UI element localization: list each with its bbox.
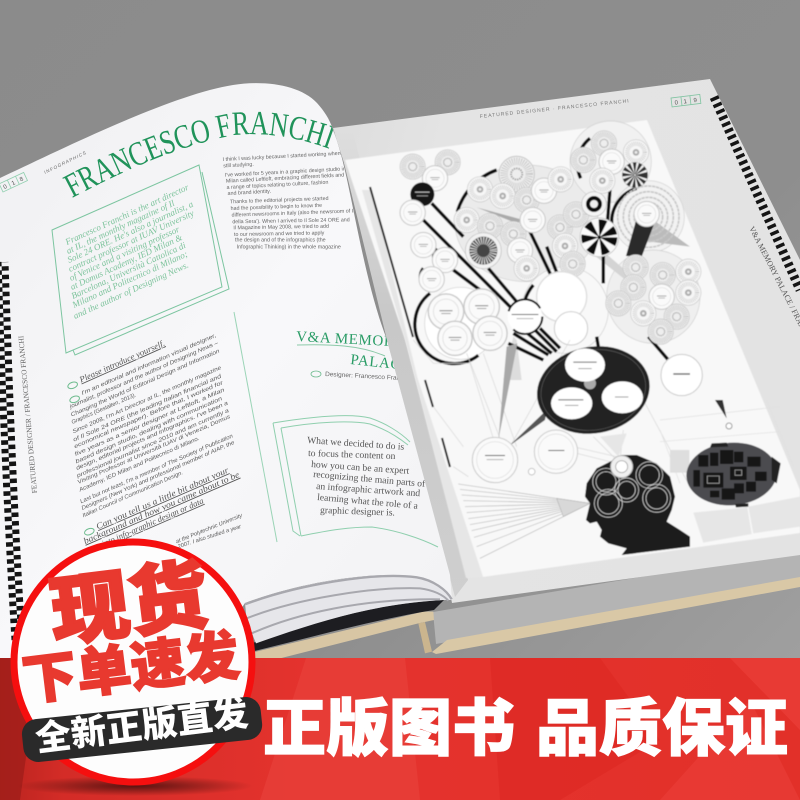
third column text: the design and of the infographics (the xyxy=(235,238,326,244)
third column text: della Sera'). When I arrived to Il Sole 24 ORE and xyxy=(232,217,350,225)
intro text: contract professor at IUAV University xyxy=(67,208,196,274)
quote text: recognizing the main parts of xyxy=(313,469,426,490)
answer body: I'm an editorial and information visual designer, xyxy=(81,333,217,397)
answer body: Changing the World of Editorial Design and Information xyxy=(70,349,221,418)
question two: background and how you came about to be xyxy=(82,469,241,546)
answer body: Italian Council of Communication Design. xyxy=(82,470,184,519)
round stamp xyxy=(14,542,264,796)
intro text: Barcelona, Università Cattolica di xyxy=(70,240,188,301)
dark textured circle xyxy=(622,162,648,188)
quote text: learning what the role of a xyxy=(317,492,419,512)
title: FRANCESCO FRANCHI xyxy=(62,112,333,198)
page number box xyxy=(671,94,701,107)
answer body: based design studio, dealing with communication xyxy=(75,396,223,465)
answer body: professional journalist since 2010 and am currently a xyxy=(75,408,230,480)
segmented fan xyxy=(618,186,679,247)
answer body: of Il Sole 24 ORE (the leading Italian financial and xyxy=(72,373,223,443)
stamp subheading: 下单速发 xyxy=(19,626,243,712)
small ring xyxy=(528,468,535,475)
lower-left circle three xyxy=(438,321,472,355)
third column text: different newsrooms in Italy (also the newsroom of Il Corriere xyxy=(232,208,375,219)
headline: 正版图书 xyxy=(263,695,515,764)
wedges xyxy=(477,207,690,380)
top-right circles xyxy=(571,131,649,193)
left white circles xyxy=(400,200,458,292)
cover board xyxy=(253,612,434,659)
intro text: at IL, the monthly magazine of Il xyxy=(65,198,176,256)
label circle left xyxy=(472,437,518,483)
question marker one xyxy=(67,381,78,390)
lower-left white circles xyxy=(428,294,464,329)
column divider xyxy=(234,312,277,542)
page number box: 9 xyxy=(693,98,698,104)
third column text: still studying. xyxy=(223,162,254,169)
page sheet xyxy=(0,83,452,670)
left page xyxy=(0,83,453,658)
quote text: how you can be an expert xyxy=(311,459,410,477)
large white circle right xyxy=(661,354,702,396)
answer body: Last but not least, I'm a member of The Society of Publication xyxy=(79,433,234,505)
intro text: and the author of Designing News. xyxy=(72,260,190,321)
question two: into info-graphic design or data xyxy=(100,495,205,548)
left header: page number: 0 xyxy=(3,184,9,191)
headline: 品质保证 xyxy=(536,695,788,764)
third column text: a range of topics relating to culture, fashion xyxy=(226,180,329,191)
small top-left circles xyxy=(400,150,460,191)
right clusters xyxy=(606,255,701,344)
pill text: 全新正版直发 xyxy=(33,694,250,759)
answer body: Academy, IED Milan and Politecnico di Milano. xyxy=(77,436,201,494)
intro text: of Venice and a visiting professor xyxy=(68,224,181,283)
stack body xyxy=(245,575,452,643)
project title: PALACE xyxy=(350,352,411,374)
grey wedges xyxy=(498,343,627,457)
third column text: and brand identity. xyxy=(227,189,271,197)
project title: V&A MEMORY xyxy=(296,329,405,351)
right book cover edge xyxy=(432,577,800,654)
plan disc xyxy=(684,440,781,508)
left header: page number: 1 xyxy=(11,180,17,187)
stamp shadow xyxy=(17,776,253,796)
lower-left circle two xyxy=(464,289,499,324)
page number box: 0 xyxy=(674,100,679,107)
cluster backgrounds xyxy=(425,121,700,359)
textured dark circle xyxy=(465,233,501,269)
cylinder cap xyxy=(634,201,659,227)
banner base xyxy=(0,658,800,800)
intro text: Sole 24 ORE. He's also a journalist, a xyxy=(66,199,195,265)
answer body xyxy=(68,333,236,519)
red banner xyxy=(0,658,800,800)
stamp large text: 现货 xyxy=(46,553,213,657)
answer two: at the Polytechnic University xyxy=(175,513,244,545)
stack shadows xyxy=(245,576,452,633)
question marker two xyxy=(84,527,95,536)
intro text: Milano and Politecnico di Milano; xyxy=(70,249,189,310)
quote text: graphic designer is. xyxy=(320,505,395,519)
black pill xyxy=(20,696,264,763)
poster: memory palace infographic xyxy=(345,120,800,578)
running head: FEATURED DESIGNER · FRANCESCO FRANCHI xyxy=(480,98,630,120)
third column text: Il Magazine in May 2008, we tried to add xyxy=(233,224,329,231)
lower-left circle four xyxy=(473,316,507,350)
lower diagram xyxy=(413,337,702,558)
third column text xyxy=(222,151,354,250)
intro text: at Domus Academy, IED Milan & xyxy=(69,232,184,292)
fan of timeline lines xyxy=(458,484,590,558)
gutter shadow xyxy=(336,128,468,597)
small ring xyxy=(726,423,732,429)
quote text: What we decided to do is xyxy=(307,435,405,453)
page number box: 1 xyxy=(683,99,688,105)
margin tick strip xyxy=(362,190,483,578)
label circle right xyxy=(534,430,578,473)
quote text: an infographic artwork and xyxy=(316,481,421,499)
intro box xyxy=(52,165,229,355)
third column text: Infographic Thinking) in the whole magazine xyxy=(237,244,341,250)
third column text: I've worked for 5 years in a graphic design studio in xyxy=(225,166,346,179)
noise text block xyxy=(670,450,689,473)
intro text xyxy=(63,182,196,321)
caption text blocks xyxy=(693,497,800,543)
interview text xyxy=(67,333,244,551)
small spike xyxy=(715,400,727,418)
black cylinder xyxy=(626,218,655,257)
right page header xyxy=(480,94,701,120)
margin black rules xyxy=(370,187,450,467)
answer body: journalist, professor and the author of Designing News – xyxy=(68,340,220,411)
question one: Please introduce yourself. xyxy=(77,338,166,385)
project title rule xyxy=(297,345,385,356)
vertical running text: FEATURED DESIGNER / FRANCESCO FRANCHI xyxy=(16,335,39,494)
clipped page text xyxy=(62,112,438,548)
answer body: Since 2008, I'm Art Director at IL, the monthly magazine xyxy=(72,365,222,435)
designer credit xyxy=(310,370,398,380)
quote box xyxy=(273,416,438,547)
poster sheet xyxy=(345,120,800,577)
third column text: Milan called Leftloft, embracing different fields and xyxy=(226,172,344,185)
quote text xyxy=(307,435,426,519)
thin construction lines xyxy=(413,340,690,487)
right page xyxy=(333,79,800,603)
quote text: to focus the content on xyxy=(308,448,396,462)
designer credit: Designer: Francesco Franchi xyxy=(325,371,409,382)
title baseline xyxy=(72,134,345,198)
black ring circle xyxy=(582,192,606,216)
third column text: had the possibility to begin to know the xyxy=(231,203,322,212)
black label circle xyxy=(410,182,434,206)
upper diagram xyxy=(400,121,701,380)
left black and white edge strip xyxy=(0,262,22,640)
headline xyxy=(263,695,788,764)
endpaper xyxy=(253,600,444,651)
centre large circles xyxy=(508,272,588,345)
right page block edge xyxy=(433,550,800,644)
third column text: Thanks to the editorial projects we started xyxy=(230,196,329,205)
third column text: I think I was lucky because I started working when I was xyxy=(222,150,355,163)
head silhouette xyxy=(585,455,690,555)
black connector lines xyxy=(407,138,668,364)
radial black and white wheel xyxy=(580,218,619,257)
intro text: Francesco Franchi is the art director xyxy=(63,182,191,247)
spine foot xyxy=(418,622,432,653)
answer body: economical newspaper). Before that, I worked for xyxy=(73,380,225,450)
answer body: five years as a senior designer at Leftloft, a Milan xyxy=(74,387,226,458)
answer body: Visiting Professor at Università IUAV di Venezia, Domus xyxy=(77,414,232,486)
stamp disc xyxy=(14,542,252,782)
left header: page number xyxy=(0,172,27,192)
answer body: Graphics (Gestalten, 2013). xyxy=(71,392,137,426)
question two: Can you tell us a little bit about your xyxy=(94,465,231,531)
answer body: design, editorial projects and infographics. I've been a xyxy=(75,401,229,472)
top-of-head white circle xyxy=(611,456,633,478)
answer marker xyxy=(69,395,80,404)
page stack xyxy=(245,575,452,643)
central grey cluster xyxy=(454,156,589,281)
palace floor plan in head xyxy=(660,400,800,543)
right black and white edge strip xyxy=(714,97,800,290)
vinyl disc xyxy=(530,337,657,443)
left header: page number: 8 xyxy=(19,176,25,183)
left cover and black endpaper xyxy=(253,600,444,659)
project title xyxy=(296,331,395,369)
third column text: to our newsroom and we tried to apply xyxy=(234,230,325,238)
facets xyxy=(0,658,800,800)
brain circles xyxy=(593,462,671,517)
answer two: 2007. I also studied a year xyxy=(176,524,243,551)
left header: section name: INFOGRAPHICS xyxy=(43,150,88,175)
construction arcs xyxy=(660,400,793,483)
answer body: Designers (New York) and professional member of AIAP, the xyxy=(81,440,236,512)
